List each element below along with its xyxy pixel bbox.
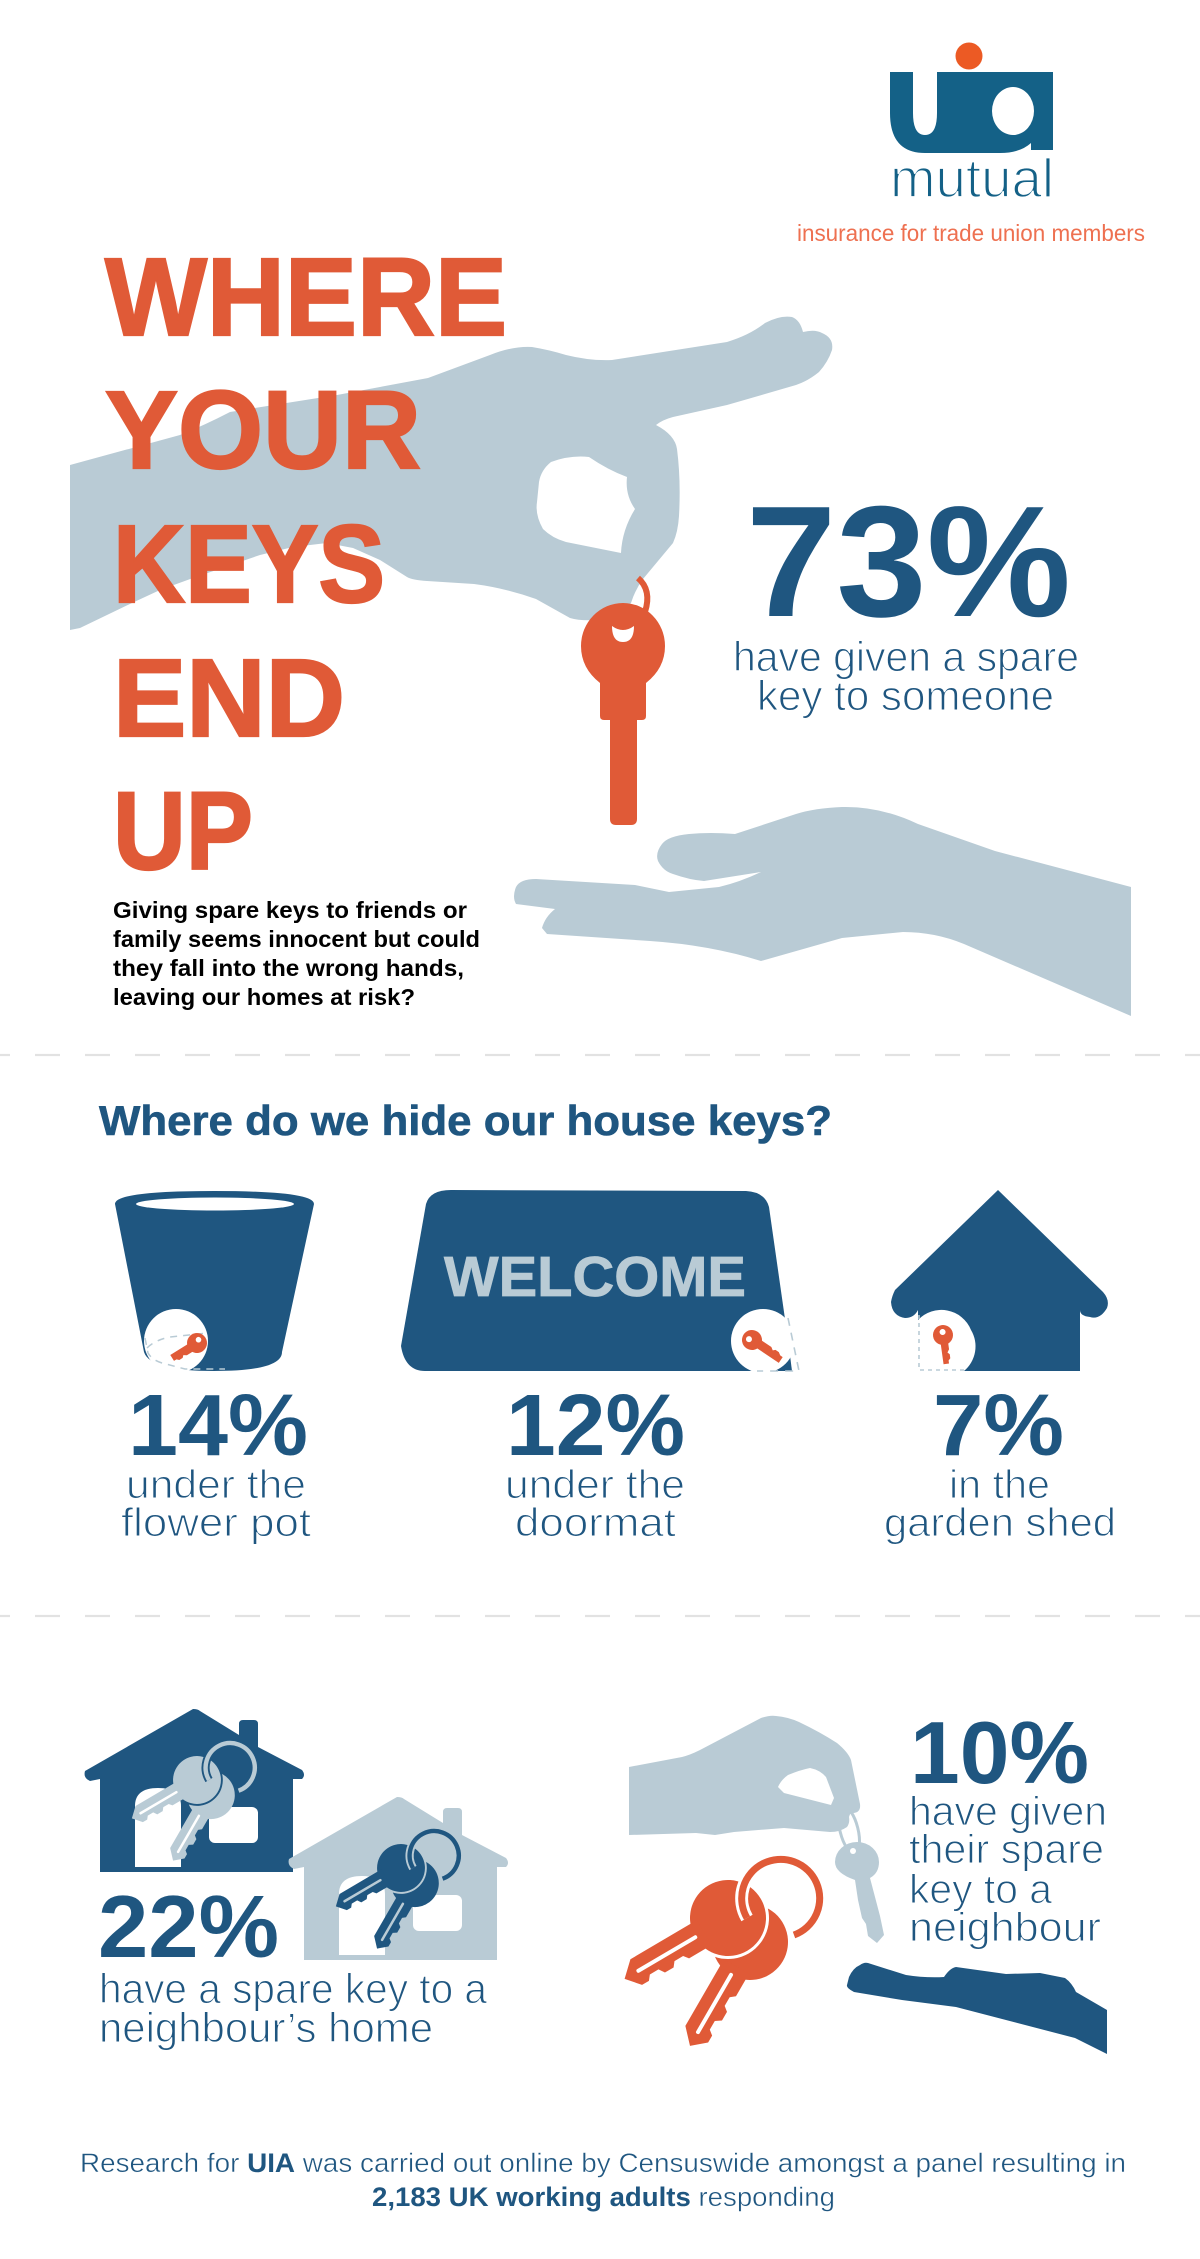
icon: light house with keys xyxy=(289,1797,508,1961)
stat: 10% given to a neighbour: key to a xyxy=(909,1866,1052,1912)
stat: 73%: 73% xyxy=(746,474,1071,650)
stat: 7% in the garden shed: 7% xyxy=(933,1377,1064,1474)
icon: hand dangling small key xyxy=(629,1716,884,1943)
stat: 12% under the doormat xyxy=(505,1377,685,1545)
stat: 10% given to a neighbour: neighbour xyxy=(909,1904,1101,1950)
stat: 14% under the flower pot: 14% xyxy=(128,1377,308,1474)
footer: research note: 2,183 UK working adults responding xyxy=(372,2182,835,2212)
stat: 12% under the doormat: 12% xyxy=(506,1377,685,1474)
title: WHERE xyxy=(105,236,507,359)
title: UP xyxy=(113,770,253,893)
logo: UIA mutual: mutual xyxy=(890,147,1054,209)
stat: 10% given to a neighbour: their spare xyxy=(909,1826,1104,1872)
stat: 10% given to a neighbour: 10% xyxy=(910,1703,1089,1802)
stat: 7% in the garden shed: garden shed xyxy=(884,1501,1116,1545)
stat: 10% given to a neighbour: have given xyxy=(909,1788,1107,1834)
title: YOUR xyxy=(105,369,421,492)
icon: garden shed with key xyxy=(891,1190,1108,1371)
stat: 7% in the garden shed: in the xyxy=(949,1463,1050,1507)
intro paragraph: Giving spare keys to friends or xyxy=(113,897,467,923)
intro paragraph: family seems innocent but could xyxy=(113,926,480,952)
footer: research note xyxy=(80,2148,1126,2212)
logo: UIA mutual: insurance for trade union members xyxy=(797,220,1145,246)
stat: 14% under the flower pot xyxy=(121,1377,311,1545)
stat: 12% under the doormat: doormat xyxy=(515,1501,676,1545)
icon: dark receiving hand xyxy=(847,1963,1107,2054)
stat: 14% under the flower pot: under the xyxy=(126,1463,306,1507)
stat: 22% have a spare key: have a spare key to a xyxy=(99,1965,488,2012)
stat: 12% under the doormat: under the xyxy=(505,1463,685,1507)
stat: 7% in the garden shed xyxy=(884,1377,1116,1545)
stat: 14% under the flower pot: flower pot xyxy=(121,1501,311,1545)
title: KEYS xyxy=(113,503,385,626)
illustration: hand holding out key xyxy=(70,317,832,825)
title xyxy=(105,236,507,893)
footer: research note: Research for UIA was carried out online by Censuswide amongst a panel resulting in xyxy=(80,2148,1126,2178)
icon: dark house with keys xyxy=(85,1709,304,1873)
stat: 73% xyxy=(733,474,1079,719)
stat: 73%: have given a spare xyxy=(733,633,1079,680)
stat: 73%: key to someone xyxy=(757,672,1054,719)
intro paragraph: they fall into the wrong hands, xyxy=(113,955,464,981)
stat: 22% have a spare key: neighbour’s home xyxy=(99,2004,433,2051)
illustration: open receiving hand xyxy=(514,807,1131,1016)
stat: 22% have a spare key xyxy=(98,1877,488,2051)
heading: where do we hide keys: Where do we hide our house keys? xyxy=(99,1097,832,1144)
logo: UIA mutual xyxy=(797,42,1145,246)
stat: 22% have a spare key: 22% xyxy=(98,1877,279,1976)
icon: welcome doormat with key xyxy=(401,1190,805,1375)
intro paragraph: leaving our homes at risk? xyxy=(113,984,415,1010)
icon: welcome doormat with key: WELCOME xyxy=(444,1245,746,1309)
icon: flower pot with key xyxy=(115,1191,314,1373)
icon: red key bunch xyxy=(604,1859,820,2065)
title: END xyxy=(113,637,345,760)
stat: 10% given to a neighbour xyxy=(909,1703,1107,1950)
intro paragraph xyxy=(113,897,480,1010)
